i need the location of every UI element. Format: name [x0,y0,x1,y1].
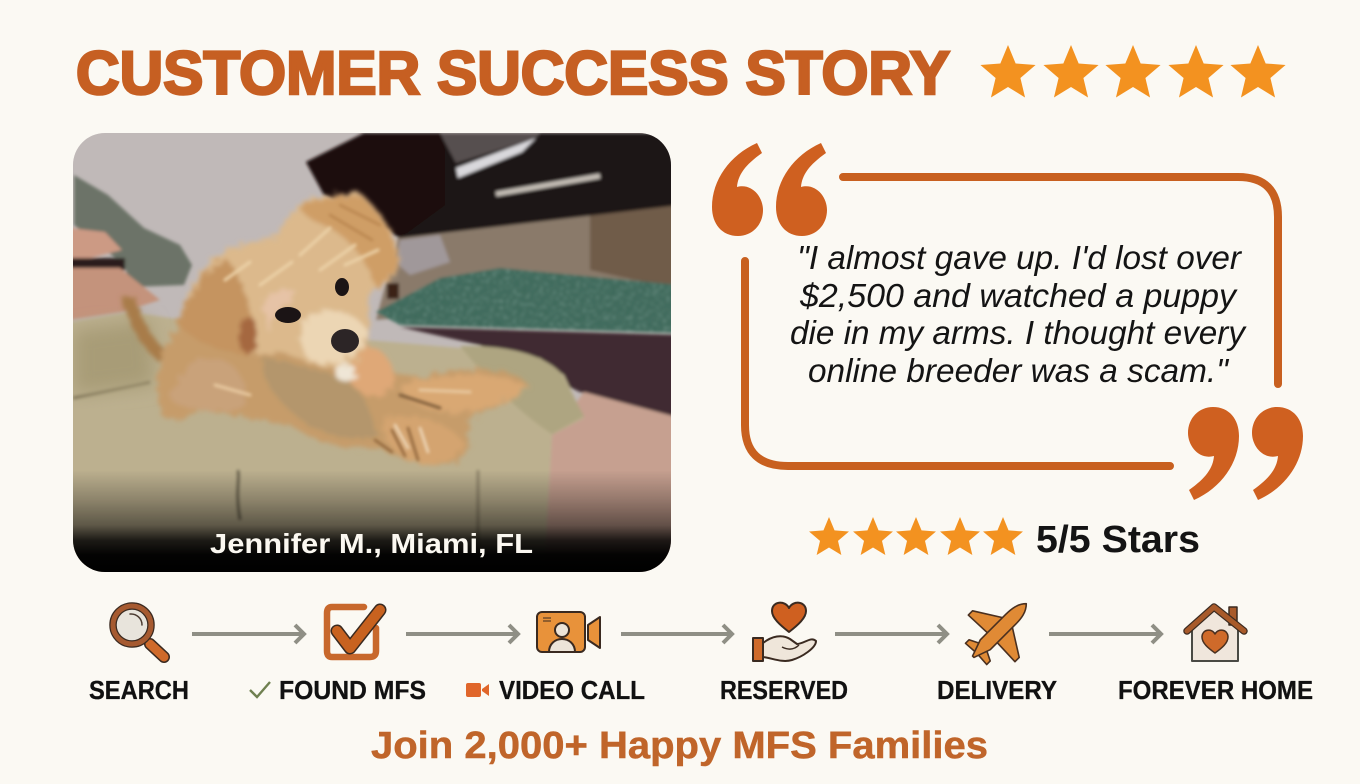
icon: five rating stars [980,45,1286,97]
step labels: FOREVER HOME [1118,675,1313,705]
testimonial quote [790,239,1248,389]
step labels: SEARCH [89,675,189,705]
icon: opening quotation mark [712,143,827,236]
step labels [89,675,1313,705]
rating text: 5/5 Stars [1036,519,1200,561]
icon: checked box [327,607,380,657]
icon: search magnifier [113,606,164,657]
arrow 2 [406,625,518,643]
icon: video camera [537,612,600,652]
icon: house with heart [1187,607,1244,661]
arrow 4 [835,625,947,643]
left shorts shading [73,320,155,395]
step labels: FOUND MFS [279,675,426,705]
testimonial quote: online breeder was a scam." [808,352,1229,389]
testimonial quote: die in my arms. I thought every [790,314,1248,351]
icon: closing quotation mark [1188,407,1303,500]
testimonial quote: $2,500 and watched a puppy [799,277,1239,314]
step labels: VIDEO CALL [499,675,645,705]
arrow 1 [192,625,304,643]
photo caption: Jennifer M., Miami, FL [210,528,533,559]
icon: airplane [950,580,1050,680]
title: CUSTOMER SUCCESS STORY [76,39,950,107]
icon: heart in hand [753,603,816,661]
icon: small rating stars [809,517,1023,555]
arrow 5 [1049,625,1161,643]
step labels: RESERVED [720,675,848,705]
photo: puppy on lap [70,133,680,572]
icon: small video camera [466,683,489,697]
arrow 3 [621,625,732,643]
icon: small check [250,682,270,697]
testimonial quote: "I almost gave up. I'd lost over [797,239,1243,276]
footer call to action: Join 2,000+ Happy MFS Families [371,725,988,767]
rating row [809,517,1200,561]
quote frame [745,177,1278,466]
step labels: DELIVERY [937,675,1057,705]
